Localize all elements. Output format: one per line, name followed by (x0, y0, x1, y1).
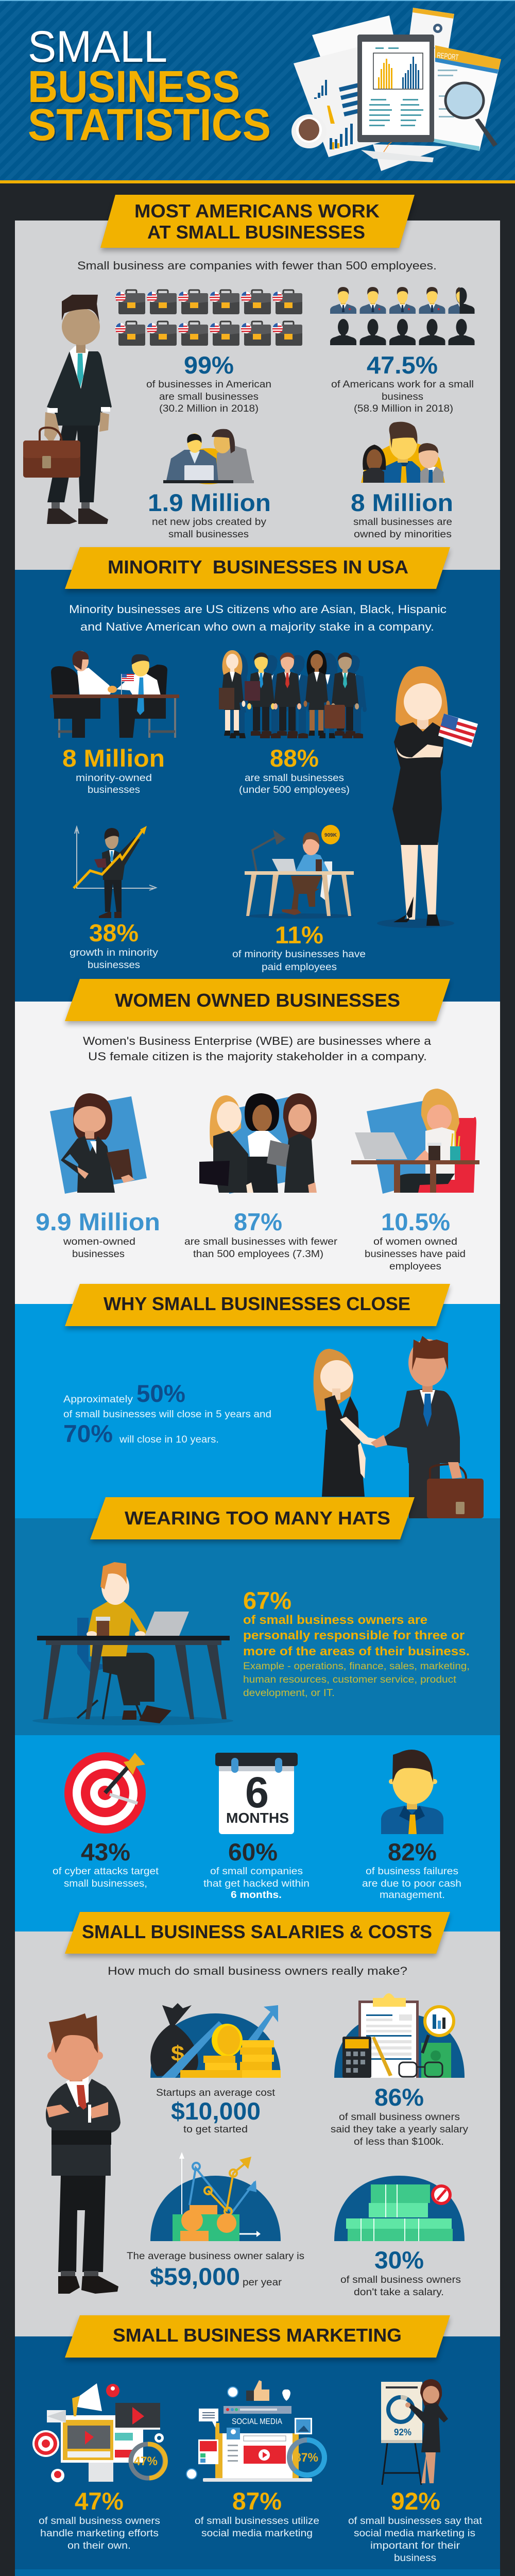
illustration: businessman with briefcase (23, 295, 112, 524)
stat: 11%: paid employees (262, 962, 337, 973)
icon: digital marketing: 47% (134, 2454, 158, 2468)
stat: 82%: 82% (388, 1838, 437, 1866)
stat: 1.9 million: small businesses (168, 529, 249, 540)
illustration: woman with folder (50, 1093, 147, 1194)
icon: startup costs (150, 2003, 281, 2078)
stat: 9.9 million (36, 1208, 160, 1260)
stat: 99%: of businesses in American (146, 379, 271, 390)
stat: 92% (348, 2487, 483, 2564)
stat: 47% marketing: 47% (75, 2487, 124, 2515)
stat: 9.9 million: 9.9 Million (36, 1208, 160, 1235)
text: 67%: more of the areas of their business. (243, 1645, 470, 1658)
stat: 9.9 million: businesses (72, 1249, 125, 1260)
stat: 87% marketing: of small businesses utilize (195, 2516, 319, 2527)
stat: 43%: small businesses, (64, 1878, 147, 1889)
stat: 60% (203, 1838, 310, 1901)
stat: 8 million owned by minorities: small businesses are (353, 517, 452, 528)
panel: salaries and costs (15, 1931, 500, 2336)
illustration: handshake couple (314, 1336, 484, 1520)
stat: 47% marketing: on their own. (67, 2540, 131, 2551)
stat: 82% (362, 1838, 461, 1901)
text: 67%: personally responsible for three or (243, 1629, 465, 1642)
stat: 99%: (30.2 Million in 2018) (159, 403, 259, 414)
title: BUSINESS (28, 62, 240, 112)
stat: 43%: of cyber attacks target (53, 1866, 159, 1877)
illustration: man at desk (245, 825, 354, 919)
stat: 10.5% (365, 1208, 466, 1272)
stat: 1.9 million: 1.9 Million (148, 489, 271, 516)
icon: social media laptop: SOCIAL MEDIA (232, 2417, 282, 2426)
banner: women owned (65, 979, 450, 1024)
illustration: two colleagues at laptop (163, 429, 254, 484)
stat: 92%: social media marketing is (354, 2528, 475, 2539)
stat: 8 million minority: businesses (88, 785, 140, 795)
panel: why small businesses close (15, 1304, 500, 1520)
text: 67% (243, 1587, 470, 1699)
icon: social media laptop (186, 2380, 324, 2482)
stat: 88%: are small businesses (245, 773, 344, 784)
icon: six months calendar: MONTHS (226, 1810, 289, 1826)
banner: salaries and costs: SMALL BUSINESS SALARIES & COSTS (82, 1921, 432, 1942)
panel: small business marketing (15, 2336, 500, 2569)
stat: 88%: 88% (270, 744, 319, 772)
banner: salaries and costs (65, 1912, 450, 1957)
stat: 82%: management. (380, 1890, 445, 1901)
stat: 47.5% (331, 351, 474, 414)
icon: social media laptop: 87% (295, 2451, 318, 2465)
icon: presenter with chart (381, 2379, 448, 2485)
stat: 38%: businesses (88, 960, 140, 971)
stat: 47.5%: 47.5% (367, 351, 438, 379)
banner: wearing too many hats: WEARING TOO MANY HATS (125, 1507, 390, 1529)
illustration: team of five (219, 650, 367, 738)
stat: startup cost: $10,000 (171, 2097, 261, 2125)
text: close rates: will close in 10 years. (119, 1434, 219, 1445)
text: 67%: 67% (243, 1587, 291, 1614)
stat: 47.5%: business (382, 392, 423, 402)
stat: 92%: of small businesses say that (348, 2516, 483, 2527)
icon: no salary cash stacks (334, 2176, 465, 2241)
text: 67%: human resources, customer service, product (243, 1674, 457, 1685)
stat: 10.5%: businesses have paid (365, 1249, 466, 1260)
stat: 38%: 38% (89, 919, 139, 946)
intro text: and Native American who own a majority stake in a company. (80, 620, 434, 633)
text: close rates: 70% (63, 1420, 113, 1447)
panel: most Americans work at small businesses (15, 221, 500, 570)
illustration: businessman with crossed arms (46, 2013, 121, 2294)
stat: 99%: are small businesses (159, 392, 259, 402)
banner: most Americans work (100, 195, 415, 251)
icon: six months calendar (215, 1753, 298, 1834)
text: 67%: of small business owners are (243, 1613, 427, 1627)
panel: website credibility (15, 2569, 500, 2576)
banner: most Americans work: AT SMALL BUSINESSES (147, 222, 365, 243)
banner: why small businesses close (65, 1284, 450, 1329)
stat: 99%: 99% (184, 351, 234, 379)
stat: 87% women: than 500 employees (7.3M) (193, 1249, 323, 1260)
intro text: How much do small business owners really make? (108, 1964, 407, 1977)
illustration: handshake meeting (50, 651, 179, 738)
text: close rates: Approximately (63, 1394, 133, 1405)
stat: 88% (239, 744, 350, 795)
panel: wearing too many hats (15, 1518, 500, 1735)
illustration: man working at desk (32, 1562, 233, 1725)
stat: 82%: of business failures (366, 1866, 458, 1877)
stat: 47.5%: of Americans work for a small (331, 379, 474, 390)
stat: 8 million owned by minorities: owned by minorities (354, 529, 452, 540)
text: close rates (63, 1380, 271, 1447)
stat: startup cost: to get started (183, 2124, 248, 2135)
stat: average salary: per year (243, 2277, 282, 2288)
icon: salary clipboard (334, 1993, 465, 2078)
intro text (69, 603, 447, 633)
stat: 87% women (184, 1208, 338, 1260)
banner: small business marketing (65, 2315, 450, 2361)
stat: 8 million minority: minority-owned (76, 773, 152, 784)
header band (0, 0, 515, 183)
icon: average salary growth (150, 2152, 281, 2241)
stat: 10.5%: of women owned (373, 1236, 457, 1247)
stat: 8 million owned by minorities: 8 Million (351, 489, 453, 516)
stat: 60%: 60% (228, 1838, 278, 1866)
illustration: woman at laptop on red chair (351, 1089, 479, 1194)
icon: six months calendar: 6 (245, 1768, 269, 1817)
stat: average salary: $59,000 (150, 2263, 240, 2290)
stat: 1.9 million (148, 489, 271, 540)
stat: 60%: of small companies (210, 1866, 303, 1877)
stat: 86% (331, 2083, 469, 2147)
stat: 11%: 11% (275, 921, 323, 948)
stat: 30%: 30% (374, 2246, 424, 2274)
stat: 92%: business (394, 2553, 436, 2564)
intro text: Women's Business Enterprise (WBE) are businesses where a (83, 1035, 432, 1047)
icon: startup costs: $ (171, 2041, 184, 2065)
illustration: businesswoman with flag (377, 666, 478, 928)
stat: 47% marketing: handle marketing efforts (40, 2528, 159, 2539)
text: 67%: Example - operations, finance, sales, marketing, (243, 1661, 470, 1672)
icon: briefcase grid (115, 290, 302, 346)
icon: target (64, 1752, 146, 1834)
stat: 60%: 6 months. (231, 1890, 282, 1901)
stat: 82%: are due to poor cash (362, 1878, 461, 1889)
banner: minority businesses (65, 547, 450, 592)
stat: 47.5%: (58.9 Million in 2018) (354, 403, 453, 414)
illustration: diverse owners (361, 422, 445, 483)
icon: presenter with chart: 92% (394, 2427, 411, 2437)
banner: minority businesses: MINORITY BUSINESSES IN USA (108, 556, 408, 578)
stat: 10.5%: employees (389, 1261, 441, 1272)
stat: 87% marketing (195, 2487, 319, 2539)
banner: wearing too many hats (90, 1497, 415, 1543)
stat: 30%: of small business owners (340, 2275, 461, 2285)
stat: startup cost (156, 2088, 276, 2135)
text: close rates: of small businesses will close in 5 years and (63, 1409, 271, 1420)
stat: 88%: (under 500 employees) (239, 785, 350, 795)
panel: cyber and cash stats (15, 1735, 500, 1931)
stat: 43% (53, 1838, 159, 1889)
stat: 87% marketing: social media marketing (201, 2528, 313, 2539)
stat: 47% marketing (39, 2487, 160, 2551)
stat: 30%: don't take a salary. (354, 2287, 444, 2298)
icon: people grid (330, 287, 475, 345)
title: SMALL (28, 22, 167, 72)
stat: 47% marketing: of small business owners (39, 2516, 160, 2527)
text: close rates: 50% (136, 1380, 185, 1407)
illustration: reports, tablet and coffee (291, 8, 501, 171)
stat: 87% marketing: 87% (232, 2487, 282, 2515)
stat: 10.5%: 10.5% (381, 1208, 450, 1235)
title (28, 22, 271, 150)
text: 67%: development, or IT. (243, 1688, 335, 1699)
stat: 11% (232, 921, 366, 973)
icon: digital marketing (32, 2383, 165, 2482)
stat: 86%: of less than $100k. (354, 2137, 444, 2147)
stat: 11%: of minority businesses have (232, 949, 366, 960)
title: STATISTICS (28, 100, 271, 150)
stat: 38% (70, 919, 159, 971)
stat: 92%: important for their (370, 2540, 460, 2551)
stat: 86%: said they take a yearly salary (331, 2124, 469, 2135)
stat: 1.9 million: net new jobs created by (152, 517, 267, 528)
banner: most Americans work: MOST AMERICANS WORK (134, 200, 380, 222)
intro text: Small business are companies with fewer than 500 employees. (77, 259, 437, 272)
stat: 8 million minority: 8 Million (62, 744, 165, 772)
stat: 8 million owned by minorities (351, 489, 453, 540)
stat: 87% women: are small businesses with fewer (184, 1236, 338, 1247)
illustration: growth chart with man (74, 826, 156, 918)
banner: women owned: WOMEN OWNED BUSINESSES (115, 990, 400, 1011)
panel: women owned businesses (15, 1002, 500, 1304)
panel: minority businesses (15, 570, 500, 1002)
stat: 60%: that get hacked within (203, 1878, 310, 1889)
illustration: man at desk: 909K (324, 833, 337, 838)
illustration: three businesswomen (199, 1093, 317, 1194)
icon: businessman bust (381, 1750, 443, 1834)
banner: why small businesses close: WHY SMALL BUSINESSES CLOSE (104, 1293, 410, 1314)
stat: 86%: 86% (374, 2083, 424, 2111)
stat: 99% (146, 351, 271, 414)
stat: 87% women: 87% (234, 1208, 282, 1235)
stat: 38%: growth in minority (70, 947, 159, 958)
stat: average salary (127, 2251, 304, 2290)
stat: 30% (340, 2246, 461, 2298)
stat: 92%: 92% (391, 2487, 440, 2515)
intro text (83, 1035, 432, 1063)
stat: average salary: The average business owner salary is (127, 2251, 304, 2262)
stat: 43%: 43% (81, 1838, 130, 1866)
stat: startup cost: Startups an average cost (156, 2088, 276, 2098)
intro text: Minority businesses are US citizens who are Asian, Black, Hispanic (69, 603, 447, 616)
stat: 8 million minority (62, 744, 165, 795)
illustration: reports, tablet and coffee: REPORT (437, 51, 459, 62)
intro text: US female citizen is the majority stakeholder in a company. (88, 1050, 427, 1063)
stat: 86%: of small business owners (339, 2112, 460, 2123)
banner: small business marketing: SMALL BUSINESS MARKETING (113, 2325, 402, 2346)
stat: 9.9 million: women-owned (63, 1236, 135, 1247)
